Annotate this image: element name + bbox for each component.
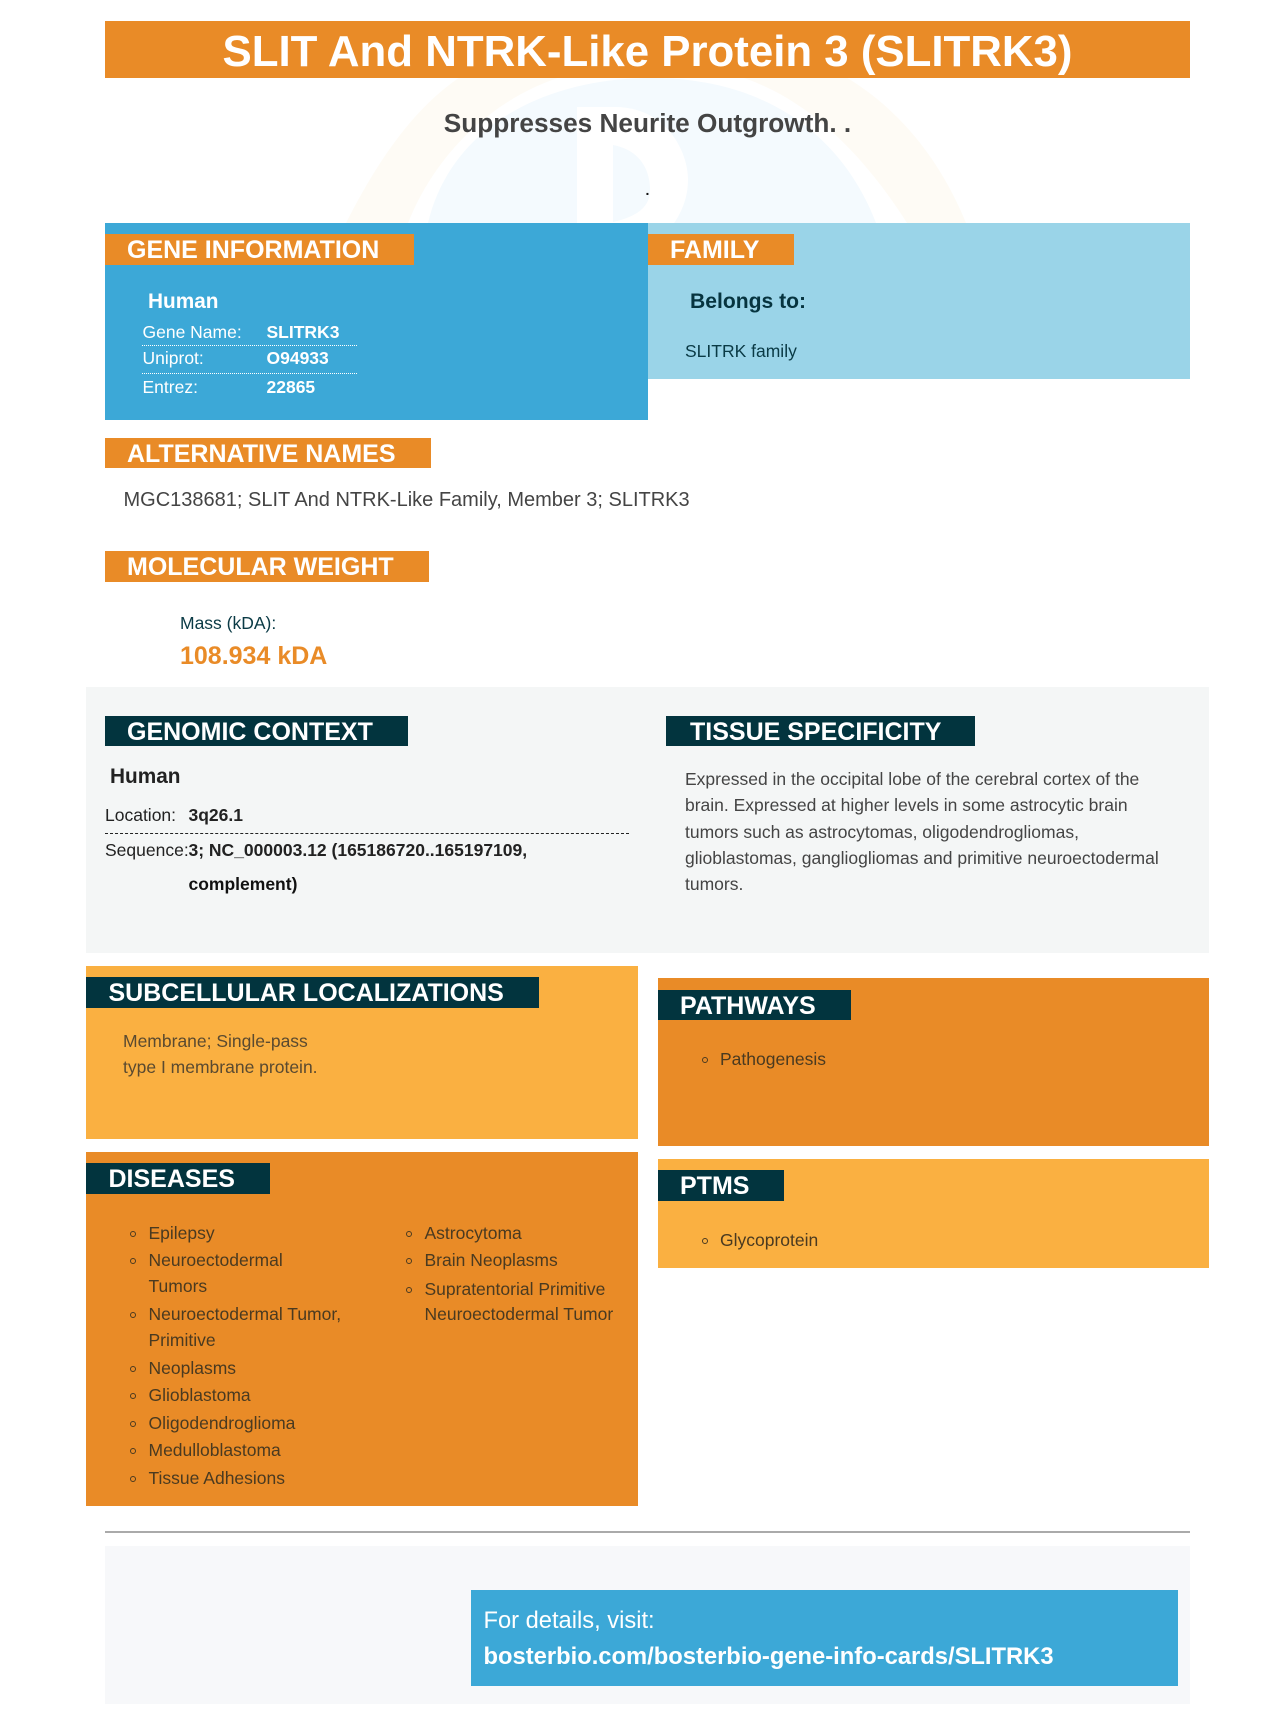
details label: For details, visit: (484, 1608, 655, 1634)
location row (105, 805, 243, 825)
localization text: Membrane; Single-pass (123, 1031, 308, 1051)
species label: Human (110, 765, 180, 788)
entrez row (142, 377, 315, 397)
disease list: column 1: Epilepsy (148, 1223, 215, 1243)
heading: gene information: GENE INFORMATION (127, 236, 379, 264)
disease list: column 1: Tumors (148, 1276, 207, 1296)
disease list: column 1: Glioblastoma (148, 1385, 251, 1405)
sequence row: 3; NC_000003.12 (165186720..165197109, (188, 840, 527, 860)
panel: footer (105, 1546, 1190, 1704)
heading: pathways: PATHWAYS (680, 992, 816, 1020)
heading: family: FAMILY (670, 236, 759, 264)
panel: subcellular localizations (86, 966, 638, 1139)
tissue specificity text: Expressed in the occipital lobe of the cerebral cortex of the (685, 769, 1139, 789)
title banner (105, 21, 1190, 78)
small dot text: . (646, 182, 649, 198)
tissue specificity text: brain. Expressed at higher levels in some astrocytic brain (685, 795, 1128, 815)
disease list: column 1: Oligodendroglioma (148, 1413, 295, 1433)
heading: ptms (658, 1170, 784, 1201)
disease list: column 1: Neuroectodermal Tumor, (148, 1304, 341, 1324)
gene name row: SLITRK3 (266, 322, 339, 342)
disease list: column 1: Tissue Adhesions (148, 1468, 285, 1488)
mass value: 108.934 kDA (180, 642, 327, 670)
callout: details link (471, 1590, 1178, 1686)
disease list: column 1: Primitive (148, 1330, 216, 1350)
location row: Location: (105, 805, 176, 825)
sequence continuation: complement) (188, 874, 297, 894)
heading: alternative names: ALTERNATIVE NAMES (127, 440, 396, 468)
mass label: Mass (kDA): (180, 613, 276, 633)
ptm list: Glycoprotein (720, 1230, 818, 1250)
panel: genomic context and tissue specificity (86, 687, 1209, 953)
heading: genomic context: GENOMIC CONTEXT (127, 718, 373, 746)
panel: pathways (658, 978, 1209, 1146)
localization text: type I membrane protein. (123, 1057, 318, 1077)
entrez row: Entrez: (142, 377, 198, 397)
species label: Human (148, 290, 218, 313)
heading: molecular weight: MOLECULAR WEIGHT (127, 553, 394, 581)
disease list: column 1: Medulloblastoma (148, 1440, 281, 1460)
tissue specificity text: glioblastomas, gangliogliomas and primitive neuroectodermal (685, 848, 1159, 868)
tissue specificity text: tumors. (685, 874, 743, 894)
disease list: column 2: Supratentorial Primitive (424, 1279, 605, 1299)
heading: ptms: PTMS (680, 1172, 749, 1200)
heading: family (648, 234, 794, 265)
details url: bosterbio.com/bosterbio-gene-info-cards/SLITRK3 (484, 1643, 1054, 1670)
family name: SLITRK family (685, 341, 797, 361)
uniprot row (142, 348, 329, 368)
disease list: column 1: Neoplasms (148, 1358, 236, 1378)
uniprot row: O94933 (266, 348, 329, 368)
heading: diseases: DISEASES (108, 1165, 235, 1193)
gene name row: Gene Name: (142, 322, 242, 342)
entrez row: 22865 (266, 377, 315, 397)
pathway list: Pathogenesis (720, 1049, 826, 1069)
heading: tissue specificity: TISSUE SPECIFICITY (690, 718, 941, 746)
panel: family (648, 223, 1190, 379)
panel: gene information (105, 223, 648, 420)
title banner: SLIT And NTRK-Like Protein 3 (SLITRK3) (222, 27, 1072, 76)
alternative names text: MGC138681; SLIT And NTRK-Like Family, Member 3; SLITRK3 (124, 489, 690, 511)
tissue specificity text: tumors such as astrocytomas, oligodendrogliomas, (685, 822, 1079, 842)
gene name row (142, 322, 339, 342)
disease list: column 2: Neuroectodermal Tumor (424, 1304, 613, 1324)
panel: ptms (658, 1159, 1209, 1268)
disease list: column 2: Astrocytoma (424, 1223, 522, 1243)
heading: diseases (86, 1163, 270, 1194)
heading: pathways (658, 990, 851, 1020)
disease list: column 2 (406, 1223, 613, 1324)
heading: subcellular localizations: SUBCELLULAR LOCALIZATIONS (108, 979, 504, 1007)
sequence row: Sequence: (105, 840, 189, 860)
disease list: column 2: Brain Neoplasms (424, 1250, 558, 1270)
panel: genomic context and tissue specificity: 3q26.1 (188, 805, 243, 825)
uniprot row: Uniprot: (142, 348, 204, 368)
belongs to label: Belongs to: (690, 290, 806, 313)
subtitle: Suppresses Neurite Outgrowth. . (444, 108, 851, 138)
disease list: column 1 (130, 1223, 341, 1488)
panel: diseases (86, 1152, 638, 1506)
localization text (123, 1031, 318, 1077)
disease list: column 1: Neuroectodermal (148, 1250, 283, 1270)
tissue specificity text (685, 769, 1159, 894)
watermark logo (346, 78, 966, 223)
